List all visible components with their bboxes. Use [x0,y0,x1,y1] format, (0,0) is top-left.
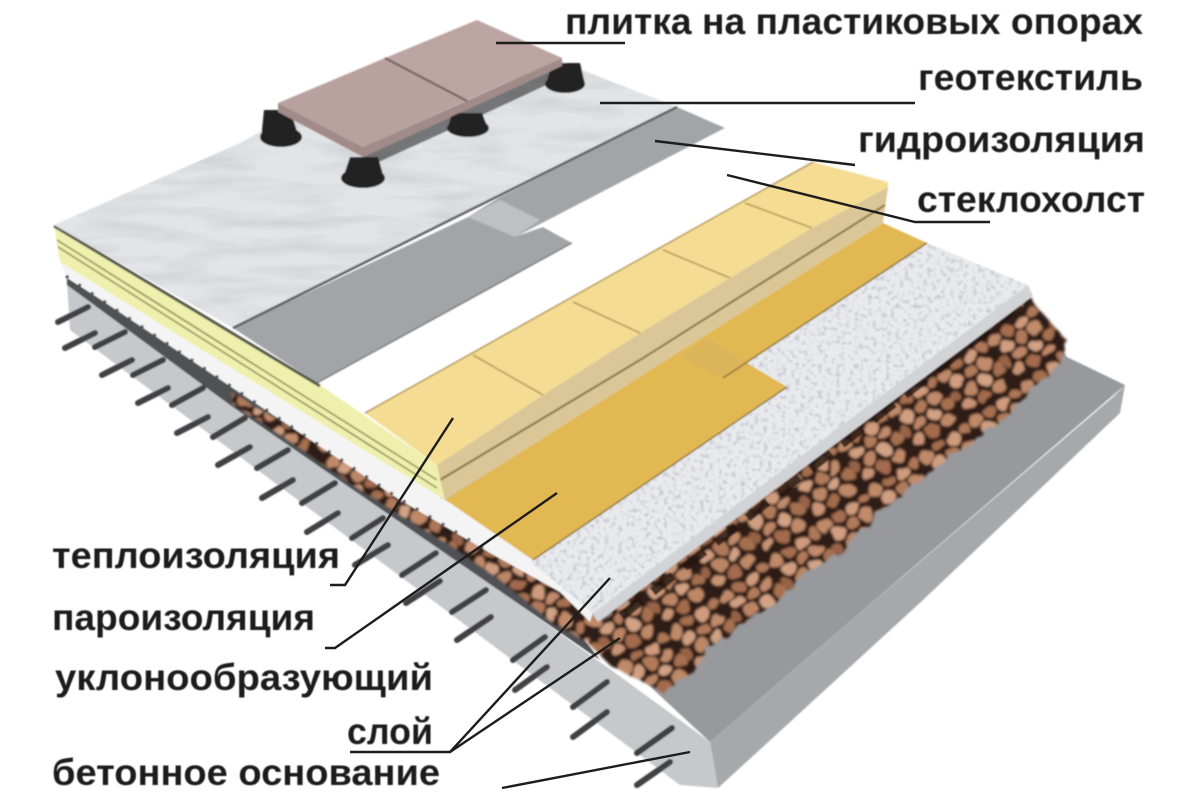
glass fibre sheet [317,128,813,413]
pale yellow side edge [54,225,445,500]
label: slope-forming: уклонообразующий [55,657,433,698]
label: thermal insulation: теплоизоляция [52,535,340,576]
waterproofing membrane [233,107,725,383]
insulation boards [365,162,888,500]
vapour barrier [445,223,927,560]
label: tiles on plastic supports: плитка на пластиковых опорах [565,1,1143,42]
label: geotextile: геотекстиль [918,57,1143,98]
paving tiles [278,20,562,157]
dark gap under slope layer [610,305,1020,625]
geotextile [54,60,677,328]
corrugated sheet edge [60,262,593,622]
label: layer: слой [347,711,433,752]
expanded clay layer [232,292,1067,693]
concrete base [67,278,1125,788]
label: vapour barrier: пароизоляция [52,597,315,638]
plastic support feet [260,63,585,188]
tile shadow [363,66,570,165]
label: waterproofing: гидроизоляция [858,119,1145,160]
label: concrete base: бетонное основание [52,752,440,793]
label: glass fibre: стеклохолст [917,179,1145,220]
leader lines [325,43,990,788]
slope layer: speckled screed [530,243,1033,622]
rebar rods [58,307,672,785]
